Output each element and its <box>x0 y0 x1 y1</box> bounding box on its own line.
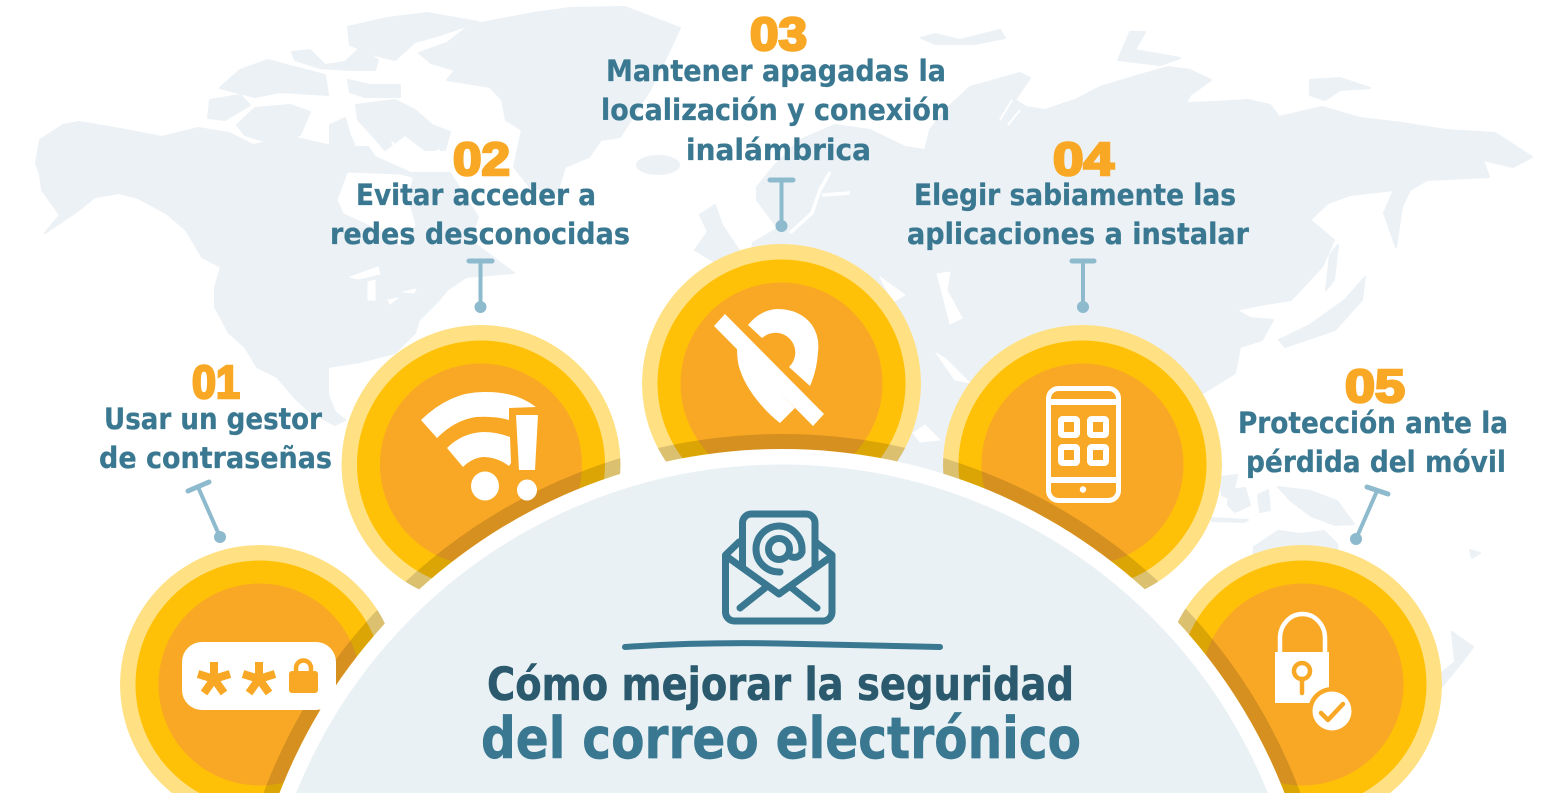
title underline <box>625 643 940 647</box>
step 05: pérdida del móvil <box>1246 445 1506 479</box>
step 01: de contraseñas <box>99 441 332 475</box>
step 04: aplicaciones a instalar <box>907 217 1250 251</box>
icon: password field <box>182 642 336 710</box>
title: Cómo mejorar la seguridad <box>487 658 1074 711</box>
badge 5 <box>1178 545 1442 793</box>
connector 04 <box>1072 261 1094 313</box>
connector 05 <box>1350 487 1388 545</box>
connector 03 <box>770 180 793 232</box>
icon: lock with check <box>1275 614 1356 735</box>
map water details <box>250 100 1020 442</box>
icon: envelope with at sign <box>726 514 832 621</box>
step 05: Protección ante la <box>1238 406 1508 440</box>
title: del correo electrónico <box>481 706 1081 772</box>
step 03 <box>601 8 950 167</box>
step 05 <box>1238 360 1508 479</box>
central semicircle panel <box>243 449 1321 793</box>
badge 1 <box>120 545 385 793</box>
step 03: localización y conexión <box>601 93 950 127</box>
step 04: 04 <box>1053 133 1114 185</box>
connector 01 <box>188 482 226 543</box>
step 03: 03 <box>750 8 807 60</box>
icon: location off <box>714 309 824 426</box>
step 02: Evitar acceder a <box>356 178 596 212</box>
step 02: 02 <box>453 133 510 185</box>
step 01 <box>99 356 332 475</box>
badge 3 <box>642 244 921 462</box>
step 02: redes desconocidas <box>330 217 630 251</box>
step 05: 05 <box>1345 360 1405 412</box>
step 01: 01 <box>192 356 240 408</box>
step 04: Elegir sabiamente las <box>914 178 1236 212</box>
badge 4 <box>943 325 1222 590</box>
step 04 <box>907 133 1250 251</box>
icon: phone with apps <box>1048 388 1119 500</box>
step 01: Usar un gestor <box>104 402 323 436</box>
connector 02 <box>469 261 492 313</box>
badge 2 <box>342 325 620 590</box>
step 02 <box>330 133 630 251</box>
step 03: inalámbrica <box>686 133 871 167</box>
title <box>481 658 1081 772</box>
icon: wifi warning <box>421 392 538 500</box>
step 03: Mantener apagadas la <box>606 54 946 88</box>
